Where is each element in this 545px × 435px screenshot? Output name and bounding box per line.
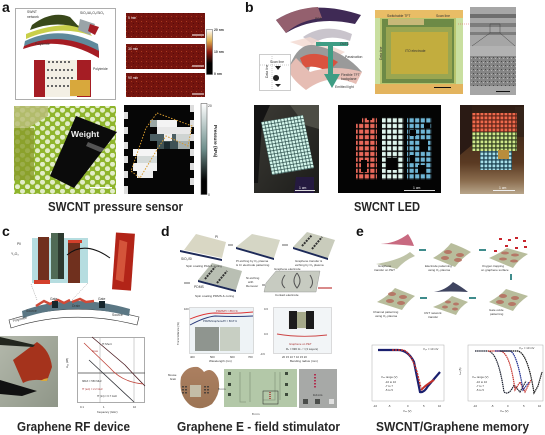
TFT micrograph: Switchable TFT xyxy=(387,14,410,18)
bending chart: -0.6 xyxy=(260,352,265,356)
exploded OLED schematic: Data line xyxy=(265,65,269,78)
pressure colour scale: Pressure (kPa) xyxy=(213,125,218,158)
panel: Graphene E-field stimulator xyxy=(161,223,340,434)
RF frequency chart: fT (int) = 6.7 GHz xyxy=(97,394,118,398)
transistor schematic: Pll xyxy=(17,242,21,246)
memory hysteresis chart left: V₀ₛ = 10 mV xyxy=(423,347,438,351)
transmittance chart: 600 xyxy=(230,355,235,359)
fabrication flow: using O₂ plasma xyxy=(375,314,397,318)
pressure colour scale: 20 xyxy=(208,104,212,108)
device schematic: SWNT xyxy=(27,10,37,14)
device schematic: network xyxy=(27,15,39,19)
memory hysteresis chart left: -5 to 5 xyxy=(385,388,393,392)
exploded OLED schematic: Flexible TFT xyxy=(341,73,360,77)
fabrication process steps: Graphene transfer & xyxy=(295,259,322,263)
memory hysteresis chart left: Vₒₛ range (V) xyxy=(381,375,397,379)
fabrication process steps: PI etching by O₂ plasma xyxy=(236,259,269,263)
fabrication process steps: Spin coating PAA & curing xyxy=(186,264,222,268)
memory hysteresis chart right: -5 to 5 xyxy=(476,388,484,392)
RF frequency chart: 10 xyxy=(133,405,137,409)
exploded OLED schematic: Scan line xyxy=(270,60,284,64)
fabrication process steps: & Cr electrode patterning xyxy=(236,263,270,267)
transmittance chart: 100 xyxy=(184,307,189,311)
fabrication flow: CNT network xyxy=(424,311,442,315)
LED photo: cyan display xyxy=(254,105,319,193)
transistor schematic: Source xyxy=(26,309,37,313)
fabrication flow: Channel patterning xyxy=(373,310,399,314)
heading: Graphene RF device xyxy=(17,420,130,434)
RF frequency chart: fT (ext) = 2.2 GHz xyxy=(82,387,103,391)
photo: flexible device xyxy=(0,336,58,407)
transmittance chart: PDMS/Graphene/PI = 80.8 % xyxy=(203,319,238,323)
memory hysteresis chart right: V₀ₛ = 10 mV xyxy=(519,346,534,350)
transmittance chart xyxy=(176,307,254,363)
fabrication flow: transfer xyxy=(428,315,438,319)
memory hysteresis chart left: -10 to 10 xyxy=(385,380,396,384)
fabrication flow: patterning xyxy=(490,312,504,316)
AFM images: 5 min xyxy=(128,16,136,20)
fabrication flow: Graphene xyxy=(378,264,392,268)
memory hysteresis chart left: 5 xyxy=(423,404,425,408)
fabrication flow xyxy=(373,234,528,319)
fabrication process steps: Ni etching xyxy=(246,276,260,280)
bending chart: 0.6 xyxy=(264,307,268,311)
transistor schematic: Drain xyxy=(72,304,80,308)
exploded OLED schematic: Passivation xyxy=(345,55,362,59)
memory hysteresis chart left: 10 xyxy=(438,404,442,408)
TFT micrograph: Scan line xyxy=(436,14,450,18)
memory hysteresis chart right: Vₒₛ range (V) xyxy=(472,375,488,379)
AFM colour scale: 20 nm xyxy=(214,28,224,32)
SEM cross-section xyxy=(458,7,516,95)
memory hysteresis chart right: -7 to 7 xyxy=(476,384,484,388)
memory hysteresis chart left: -5 xyxy=(388,404,391,408)
bending chart: Graphene on PET xyxy=(289,342,312,346)
memory hysteresis chart left xyxy=(372,345,444,413)
transmittance chart: 400 xyxy=(190,355,195,359)
memory hysteresis chart right: 5 xyxy=(523,404,525,408)
memory hysteresis chart right xyxy=(458,345,543,413)
heading: SWCNT LED xyxy=(354,200,420,214)
AFM images: 30 min xyxy=(128,47,138,51)
heading: Graphene E - field stimulator xyxy=(177,420,340,434)
transmittance chart: Wavelength (nm) xyxy=(209,359,232,363)
device schematic: Polyimide xyxy=(35,42,50,46)
electrode array micrograph xyxy=(218,369,297,416)
fabrication flow: Gate oxide xyxy=(489,308,504,312)
fabrication flow: transfer on PET xyxy=(374,268,395,272)
panel: SWCNT/Graphene memory xyxy=(356,223,543,434)
panel label d: d xyxy=(161,223,170,239)
bending chart: Rₛ = 696 Ω □⁻¹ (3 Layers) xyxy=(286,347,318,351)
RF frequency chart: fT,Short xyxy=(102,342,112,346)
memory hysteresis chart right: -10 xyxy=(473,404,477,408)
RF frequency chart xyxy=(65,337,145,414)
fabrication process steps: PI xyxy=(215,235,218,239)
memory hysteresis chart left: Vₒₛ (V) xyxy=(403,409,412,413)
fabrication process steps: Spin coating PDMS & curing xyxy=(195,294,234,298)
LED photo: cyan display: 1 cm xyxy=(299,186,307,190)
panel label e: e xyxy=(356,223,364,239)
pressure map xyxy=(124,105,194,194)
memory hysteresis chart right: -10 to 10 xyxy=(476,380,487,384)
RF frequency chart: H₂₁ (dB) xyxy=(65,358,69,368)
AFM images xyxy=(126,13,205,97)
heading: SWCNT pressure sensor xyxy=(48,200,183,214)
fabrication process steps xyxy=(180,232,335,298)
RF frequency chart: 0.1 xyxy=(80,405,84,409)
exploded OLED schematic: Emitted light xyxy=(335,85,354,89)
device schematic: SiO₂/Al₂O₃/SiO₂ xyxy=(80,11,105,15)
memory hysteresis chart left: 0 xyxy=(407,404,409,408)
TFT micrograph: Data line xyxy=(379,47,383,60)
panel: SWCNT pressure sensor xyxy=(2,0,224,214)
transistor schematic: Gate xyxy=(50,297,57,301)
transistor schematic: Source xyxy=(112,313,123,317)
transmittance chart: Transmittance (%) xyxy=(176,322,180,345)
heading: SWCNT/Graphene memory xyxy=(376,420,529,434)
AFM colour scale: 10 nm xyxy=(214,50,224,54)
memory hysteresis chart right: Iₛₒ (A) xyxy=(458,368,462,375)
LED photo: multicolour display xyxy=(460,105,524,194)
AFM colour scale xyxy=(206,28,224,76)
memory hysteresis chart right: 10 xyxy=(538,404,542,408)
bending chart: Bending radius (mm) xyxy=(290,359,318,363)
device schematic xyxy=(16,8,116,100)
LED photo: multicolour display: 1 cm xyxy=(499,186,507,190)
exploded OLED schematic: OLED xyxy=(340,42,350,46)
TFT micrograph: ITO electrode xyxy=(405,49,426,53)
transistor schematic: Gate xyxy=(98,297,105,301)
transmittance chart: PDMS/PI = 88.0 % xyxy=(216,309,238,313)
brain photo: Mouse xyxy=(168,373,177,377)
exploded OLED schematic xyxy=(260,7,362,90)
fabrication flow: on graphene surface xyxy=(481,268,509,272)
RF frequency chart: fMAX = 550 MHz xyxy=(82,379,102,383)
fabrication process steps: etching by O₂ plasma xyxy=(295,263,324,267)
bending chart: 20 15 10 7 10 15 20 xyxy=(282,355,307,359)
pressure colour scale xyxy=(201,104,218,197)
fabrication flow: Oxygen trapping xyxy=(482,264,504,268)
RF frequency chart: 1 xyxy=(103,405,105,409)
fabrication process steps: Remover xyxy=(246,284,258,288)
brain photo: brain xyxy=(170,377,177,381)
transistor schematic: Y₂O₃ xyxy=(11,252,19,256)
RF frequency chart: fmax xyxy=(92,349,99,353)
panel: Graphene RF device xyxy=(0,223,145,434)
memory hysteresis chart left: -10 xyxy=(373,404,377,408)
transistor schematic xyxy=(9,232,139,328)
zoomed electrode inset: 0.2 mm xyxy=(313,393,323,397)
electrode array micrograph: 8 mm xyxy=(252,412,260,416)
panel: SWCNT LED xyxy=(245,0,524,214)
LED photo: red white blue display: 1 cm xyxy=(413,186,421,190)
fabrication process steps: Contact electrode xyxy=(275,293,299,297)
exploded OLED schematic: backplane xyxy=(341,77,357,81)
RF frequency chart: frequency (GHz) xyxy=(97,410,118,414)
electrode array micrograph: 8 mm xyxy=(218,387,226,391)
AFM images: 90 min xyxy=(128,76,138,80)
transistor schematic: Polyimide xyxy=(12,316,28,323)
device schematic: Polyimide xyxy=(93,67,108,71)
brain photo xyxy=(168,367,219,408)
transmittance chart: 700 xyxy=(248,355,253,359)
photo: weight on sensor: Weight xyxy=(71,129,99,139)
memory hysteresis chart right: -5 xyxy=(491,404,494,408)
memory hysteresis chart left: -7 to 7 xyxy=(385,384,393,388)
fabrication flow: using O₂ plasma xyxy=(428,268,450,272)
pressure colour scale: 0 xyxy=(208,193,210,197)
bending chart: 0.0 xyxy=(264,332,268,336)
LED photo: red white blue display xyxy=(338,105,441,193)
memory hysteresis chart right: Vₒₛ (V) xyxy=(500,409,509,413)
photo: weight on sensor xyxy=(14,106,117,194)
memory hysteresis chart right: 0 xyxy=(507,404,509,408)
fabrication process steps: with xyxy=(248,280,254,284)
panel label c: c xyxy=(2,223,10,239)
exploded OLED schematic: PSA xyxy=(315,17,323,21)
zoomed electrode inset xyxy=(299,369,337,408)
fabrication process steps: SiO₂/Si xyxy=(181,257,192,261)
fabrication flow: Electrode patterning xyxy=(425,264,452,268)
transmittance chart: 500 xyxy=(210,355,215,359)
fabrication process steps: PDMS xyxy=(194,285,205,289)
fabrication process steps: Graphene electrode xyxy=(274,267,301,271)
TFT micrograph xyxy=(375,10,463,94)
bending chart xyxy=(260,307,332,363)
AFM colour scale: 0 nm xyxy=(214,72,222,76)
